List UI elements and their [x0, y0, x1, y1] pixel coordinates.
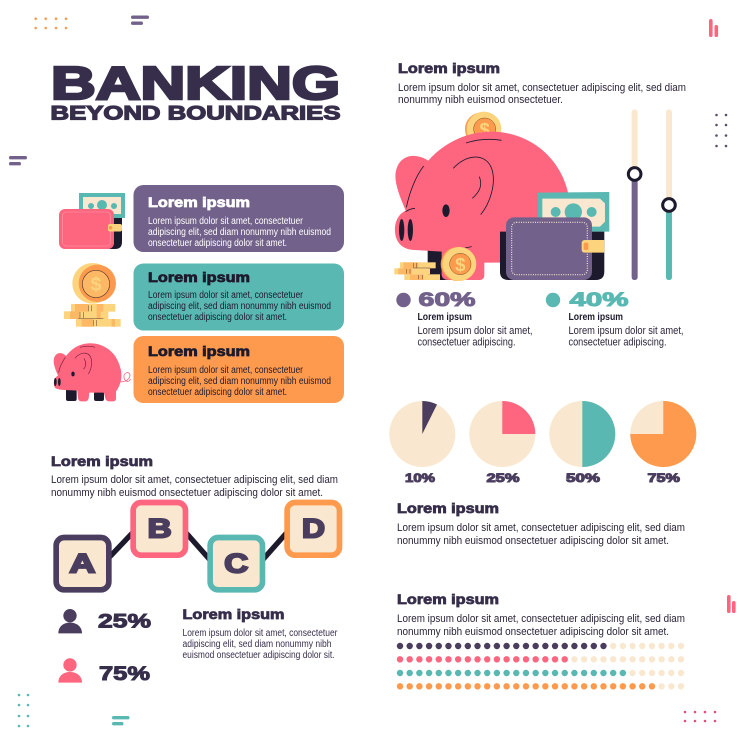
pie chart: 75 percent — [630, 401, 696, 485]
text block: left intro: Lorem ipsum — [51, 454, 153, 469]
slider: 40 percent — [663, 109, 675, 280]
pie chart: 75 percent: 75% — [648, 471, 680, 485]
title: BANKING — [51, 57, 340, 109]
panel: orange card: adipiscing elit, sed diam nonummy nibh euismod — [148, 376, 331, 387]
text block: lower left: adipiscing elit, sed diam nonummy nibh — [182, 639, 332, 650]
panel: orange card — [134, 336, 344, 403]
icon: wallet with banknote — [59, 193, 125, 249]
chart: dot progress rows — [400, 646, 684, 686]
pie chart: 25 percent — [469, 401, 535, 485]
stat: 40 percent: 40% — [570, 290, 629, 311]
text block: right middle — [397, 501, 685, 547]
text block: lower left — [182, 607, 338, 661]
icon: coin on stack: $ — [91, 275, 102, 296]
chart: ABCD step blocks: D — [302, 513, 325, 543]
text block: lower left: euismod onsectetuer adipiscing dolor sit. — [182, 650, 334, 661]
slider: 60 percent — [628, 109, 641, 280]
title: BEYOND BOUNDARIES — [50, 104, 340, 124]
text block: left intro: Lorem ipsum dolor sit amet, consectetuer adipiscing elit, sed diam — [51, 474, 338, 486]
icon: person dark — [58, 609, 82, 633]
panel: orange card: Lorem ipsum dolor sit amet, consectetuer — [148, 365, 304, 376]
text block: left intro: nonummy nibh euismod onsectetuer adipiscing dolor sit amet. — [51, 487, 323, 499]
panel: purple card: Lorem ipsum — [148, 195, 250, 210]
chart: ABCD step blocks: C — [224, 549, 248, 579]
stat: 40 percent: Lorem ipsum — [568, 312, 623, 323]
illustration: piggy bank with wallet and coins — [394, 109, 675, 281]
panel: teal card: adipiscing elit, sed diam nonummy nibh euismod — [148, 301, 331, 312]
piggy body — [395, 132, 569, 280]
text block: left intro — [51, 454, 338, 499]
chart: ABCD step blocks — [56, 502, 339, 590]
panel: orange card: Lorem ipsum — [148, 344, 250, 359]
stat: 60 percent — [396, 290, 532, 348]
text block: right middle: nonummy nibh euismod onsectetuer adipiscing dolor sit amet. — [397, 535, 669, 547]
stat: 60 percent: consectetuer adipiscing. — [418, 336, 516, 348]
text block: right intro: Lorem ipsum dolor sit amet, consectetuer adipiscing elit, sed diam — [398, 82, 686, 94]
icon: front coin — [441, 247, 476, 281]
chart: ABCD step blocks: B — [148, 513, 172, 543]
icon: coin on stack — [64, 263, 121, 327]
text block: right lower: Lorem ipsum — [397, 592, 499, 607]
panel: purple card: onsectetuer adipiscing dolor sit amet. — [148, 238, 287, 249]
pie chart: 25 percent: 25% — [486, 471, 520, 485]
text block: right intro: Lorem ipsum — [398, 61, 500, 76]
panel: orange card: onsectetuer adipiscing dolor sit amet. — [148, 387, 287, 398]
icon: small piggy bank — [54, 343, 131, 401]
stat: 40 percent — [546, 290, 684, 348]
stat: 40 percent: Lorem ipsum dolor sit amet, — [568, 325, 684, 337]
panel: purple card: adipiscing elit, sed diam nonummy nibh euismod — [148, 227, 331, 238]
text block: lower left: Lorem ipsum dolor sit amet, consectetuer — [182, 628, 338, 639]
stat: 75 percent: 75% — [99, 664, 150, 685]
stat: 60 percent: 60% — [418, 290, 476, 311]
stat: 60 percent: Lorem ipsum — [418, 312, 472, 323]
chart: ABCD step blocks: A — [69, 548, 95, 578]
stat: 25 percent: 25% — [98, 612, 151, 632]
title — [50, 57, 340, 124]
icon: banknote — [538, 192, 609, 232]
pie chart: 50 percent — [549, 401, 615, 485]
icon: large wallet — [500, 217, 604, 280]
panel: teal card: Lorem ipsum — [148, 270, 250, 285]
stat: 60 percent: Lorem ipsum dolor sit amet, — [418, 325, 532, 337]
text block: right middle: Lorem ipsum dolor sit amet, consectetuer adipiscing elit, sed diam — [397, 522, 685, 534]
icon: coin entering slot — [465, 112, 501, 146]
pie chart: 10 percent: 10% — [405, 471, 435, 485]
icon: coin entering slot: $ — [479, 119, 490, 140]
text block: right lower: Lorem ipsum dolor sit amet, consectetuer adipiscing elit, sed diam — [397, 613, 685, 625]
text block: right lower — [397, 592, 685, 638]
panel: purple card: Lorem ipsum dolor sit amet, consectetuer — [148, 216, 304, 227]
panel: purple card — [134, 185, 344, 252]
icon: coin stack — [394, 262, 440, 280]
text block: right lower: nonummy nibh euismod onsectetuer adipiscing dolor sit amet. — [397, 626, 669, 638]
panel: teal card: onsectetuer adipiscing dolor sit amet. — [148, 312, 287, 323]
icon: person pink — [58, 658, 82, 683]
icon: front coin: $ — [455, 254, 466, 275]
panel: teal card — [134, 264, 344, 330]
text block: right middle: Lorem ipsum — [397, 501, 499, 516]
pie chart: 10 percent — [389, 401, 455, 485]
text block: right intro — [398, 61, 686, 106]
panel: teal card: Lorem ipsum dolor sit amet, consectetuer — [148, 290, 304, 301]
text block: lower left: Lorem ipsum — [182, 607, 284, 622]
stat: 40 percent: consectetuer adipiscing. — [568, 336, 666, 348]
pie chart: 50 percent: 50% — [566, 471, 600, 485]
text block: right intro: nonummy nibh euismod onsectetuer. — [398, 94, 563, 106]
